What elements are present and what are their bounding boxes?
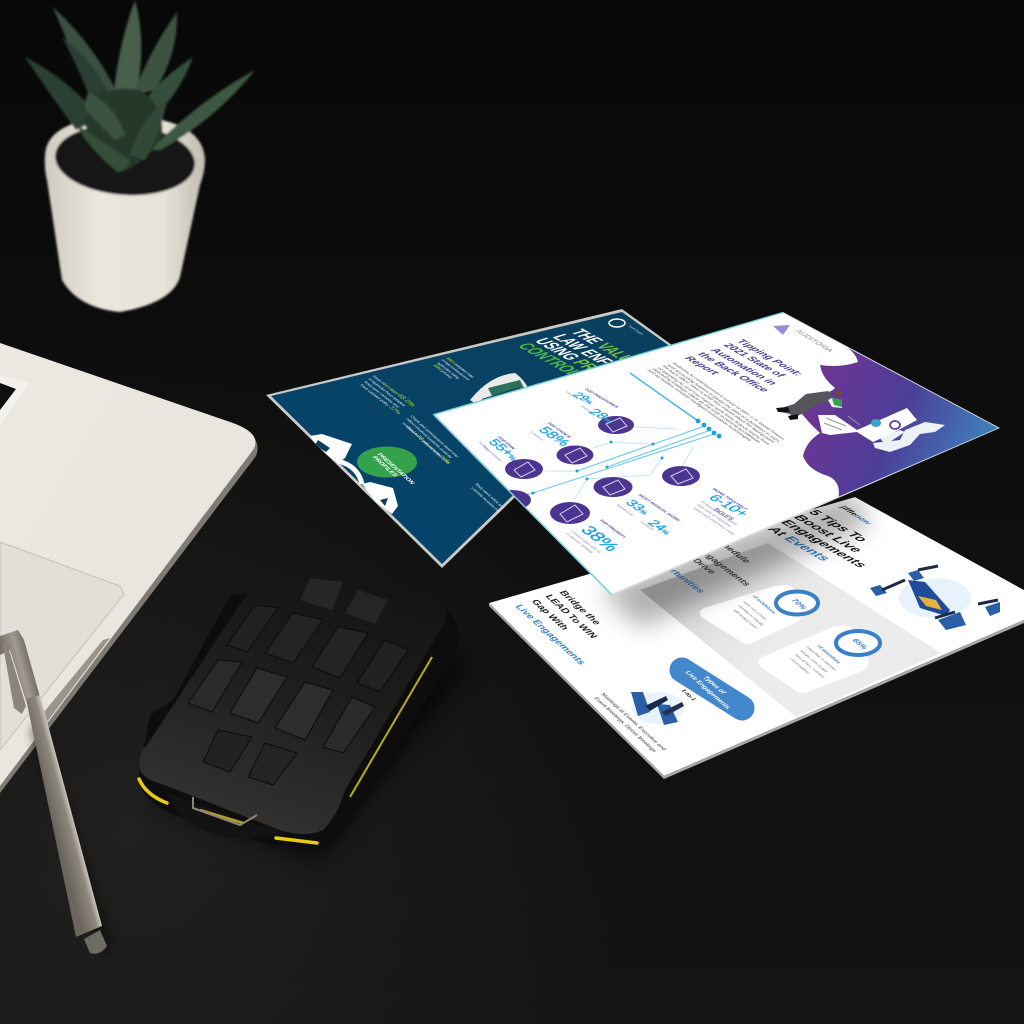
stat 6-10+ hours: 6-10+ <box>705 493 752 519</box>
pen barrel <box>26 695 102 937</box>
title: the Back Office <box>694 352 771 393</box>
heading: bridge the gap: Bridge the <box>556 590 603 626</box>
stat 6-10+ hours: hours <box>711 507 737 521</box>
heading <box>520 328 631 374</box>
title: Automation in <box>707 348 779 386</box>
illustration: robot <box>873 422 945 452</box>
logo: jifflenow: jifflenow <box>837 504 875 526</box>
grey band <box>640 543 941 717</box>
stat 33% and 24%: 24% <box>644 518 677 537</box>
title <box>681 339 805 393</box>
card face <box>435 313 884 594</box>
connector dots <box>532 419 721 494</box>
stats lower <box>402 416 504 513</box>
stat descriptions: of finance teams spend <box>700 501 739 525</box>
stat 55+%: 55+% <box>486 437 523 463</box>
heading: USING PRIVACY <box>530 337 635 391</box>
hidden tip text: Opportunities <box>648 554 707 594</box>
case shadow <box>150 650 480 860</box>
stat labels: TOP PRESSURES <box>583 388 620 408</box>
pen cap <box>0 630 40 701</box>
card thickness <box>489 603 1024 779</box>
stat descriptions: Connect data with AI <box>569 530 603 553</box>
stats lower: resolved faster with redaction tools <box>401 422 451 464</box>
heading: tips: At Events <box>764 526 835 562</box>
stats top: 2022 privacy <box>432 364 455 379</box>
yellow trim <box>139 779 317 843</box>
stat labels: MOST MANUAL WORK <box>637 494 683 522</box>
stats top: of agencies have adopted <box>367 378 408 407</box>
card face <box>271 312 668 564</box>
illustration: paper report <box>818 408 917 442</box>
stat descriptions: Leaders <box>529 431 545 441</box>
illustration: isometric meeting <box>870 566 1000 630</box>
stats top <box>358 357 476 415</box>
blue card: law enforcement value <box>266 309 680 568</box>
top white card: tipping point report <box>433 312 1000 596</box>
stats lower: Citizen 73 percent trust 27% <box>404 426 452 465</box>
stat card 65%: 65% <box>850 638 870 650</box>
stat card 65%: conversations <box>789 658 811 674</box>
stat descriptions: in finance strategy <box>565 533 595 554</box>
intro paragraph <box>646 362 787 446</box>
stat card 70%: monthly or virtually <box>737 605 765 626</box>
stat card 70%: of exhibitors <box>751 595 778 615</box>
heading: bridge the gap: LEAD To WIN <box>542 594 599 640</box>
laptop <box>0 343 258 793</box>
stat 29% and 28%: 29% <box>570 391 598 406</box>
purple wave panel <box>797 348 1000 500</box>
card face <box>489 497 1024 776</box>
logo: auditoria: AUDITORIA <box>793 329 836 353</box>
case latch <box>167 793 283 838</box>
intro paragraph: and accounting leaders to gauge the state of automation in 2021 <box>666 364 782 443</box>
title: 2021 State of <box>720 343 787 379</box>
stat descriptions: Invoices <box>639 521 656 531</box>
hidden tip text <box>670 546 750 593</box>
intro paragraph: Auditoria.AI commissioned a survey of 300+ U.S.-based finance <box>671 362 787 441</box>
logo mark: PARTNER <box>627 325 644 336</box>
heading: tips: Engagements <box>777 519 871 569</box>
leaf core <box>85 89 162 170</box>
heading: tips: Boost Live <box>790 514 867 554</box>
laptop body <box>0 343 256 786</box>
title: Report <box>681 356 721 376</box>
intro paragraph: the back office. Here is what they shared about the tipping point <box>661 365 777 444</box>
stat card 65%: breaks, more people <box>799 650 829 673</box>
fan graphic <box>470 373 528 402</box>
bottom card: jifflenow live engagements <box>489 497 1024 779</box>
yellow side stripe <box>350 657 432 797</box>
stat 58%: 58% <box>535 425 573 449</box>
heading: bridge the gap: Gap With <box>528 599 571 631</box>
pill: types of live engagements: Live Engagements <box>683 670 732 710</box>
case body <box>140 556 445 834</box>
soil <box>53 120 197 200</box>
stat card 65%: of attendees <box>816 645 842 664</box>
port facet <box>44 638 110 722</box>
logo mark <box>609 319 644 336</box>
meeting description: Meetings at Events, Executive and <box>599 693 667 751</box>
shadow under white card <box>600 490 870 628</box>
heading: LAW ENFORCEMENT <box>548 333 680 402</box>
circle: presentation profiles: PRESENTATION <box>375 453 415 485</box>
connector lines <box>525 373 714 495</box>
heading: tips: 5 Tips To <box>805 509 871 543</box>
stat descriptions: Teams <box>579 405 594 413</box>
stat 33% and 24% <box>622 498 677 537</box>
stat labels: MORE THAN HALF <box>711 488 750 511</box>
stats lower: Body-worn video and privacy <box>474 483 517 518</box>
stat card 70%: with budget spent <box>732 609 759 630</box>
icon: meeting tiles <box>631 692 684 725</box>
label: 1-to-1: 1-to-1 <box>679 689 697 702</box>
stat descriptions: Survey <box>477 441 491 450</box>
stats lower: controls increase transparency <box>470 487 515 524</box>
stats top: 2021 adoption rate <box>445 357 476 379</box>
stat 33% and 24%: 33% <box>622 498 655 517</box>
heading: THE VALUE <box>566 328 646 368</box>
heading: bridge the gap <box>516 590 599 664</box>
stats top: have updated policy 37% <box>358 384 402 415</box>
circle: presentation profiles <box>357 446 417 485</box>
stat 38%: 38% <box>577 523 624 554</box>
title: Tipping Point: <box>733 339 805 377</box>
rubber pads <box>188 578 408 785</box>
base and side rails <box>138 570 460 850</box>
logo: auditoria <box>773 325 836 353</box>
meeting description: Event Meetings, Dinner Meetings <box>592 697 658 753</box>
stat card 65% <box>758 625 880 693</box>
icon glyphs inside circles <box>514 418 693 522</box>
stat labels <box>496 388 750 539</box>
stat labels: TOP CHOICE <box>546 422 573 439</box>
card rim <box>266 309 672 568</box>
stat 29% and 28%: 28% <box>586 407 619 424</box>
hidden tip text: Drive <box>690 558 718 575</box>
stat descriptions: Respondents <box>481 445 504 462</box>
stat labels: TOP PRIORITY <box>598 519 628 539</box>
heading: CONTROL <box>513 342 586 378</box>
stat descriptions: their time on repetitive <box>696 504 733 527</box>
card rim <box>433 312 1000 596</box>
potted plant <box>25 0 255 312</box>
laptop edge <box>0 348 258 793</box>
stat card 70%: were met COVID <box>742 601 768 621</box>
stat card 65%: noted that, in attendee <box>805 646 837 671</box>
cyan edges <box>434 312 783 595</box>
pen clip <box>2 640 26 714</box>
small connector icons <box>315 440 388 506</box>
pen shadow <box>30 720 112 956</box>
heading: bridge the gap: Live Engagements <box>512 604 588 666</box>
rugged memory card case <box>138 556 480 860</box>
stats top: of law enforcement <box>440 359 472 381</box>
stat 29% and 28% <box>572 392 612 422</box>
stats top: Since 2017-2018 48.0% <box>370 374 417 407</box>
stat descriptions: Month-end <box>615 504 635 516</box>
hidden tip text: Engagements <box>694 547 753 587</box>
white pot <box>45 116 205 312</box>
stat descriptions: tasks each and every week <box>692 507 737 535</box>
stylus pen <box>0 630 112 956</box>
icon circles <box>493 416 700 524</box>
stats lower: officer-involved incidents could be <box>405 418 455 459</box>
stats top: agencies using <box>436 362 462 379</box>
keyboard corner <box>0 375 30 425</box>
intro paragraph: delivering strategic value as the shift to remote accelerates <box>651 368 762 443</box>
white connector shapes <box>310 434 398 514</box>
stat card 65%: face-to-face, real-time <box>794 654 826 679</box>
stat card 70% <box>700 585 818 644</box>
stat card 70%: 70% <box>789 598 809 610</box>
pen tip <box>84 930 107 954</box>
hidden tip text: Schedule <box>710 536 753 564</box>
stat descriptions <box>477 391 739 554</box>
faint connector branches <box>545 427 693 500</box>
aloe leaves <box>25 0 255 172</box>
stats lower: Chiefs and commanders report that <box>409 415 461 458</box>
stat descriptions: Finance <box>564 391 581 400</box>
pill: types of live engagements: Types of <box>701 675 728 695</box>
intro paragraph: of adopting AI, and how manual work limits finance teams from <box>656 367 772 446</box>
illustration: businessman <box>776 390 842 420</box>
circle: presentation profiles: PROFILES <box>370 456 398 477</box>
stats top: body-worn cameras and <box>363 381 401 408</box>
trackpad <box>0 542 124 750</box>
intro paragraph: and as leaders consider intelligent automation technologies <box>646 369 753 442</box>
stat labels: TOP PAIN <box>496 436 516 450</box>
